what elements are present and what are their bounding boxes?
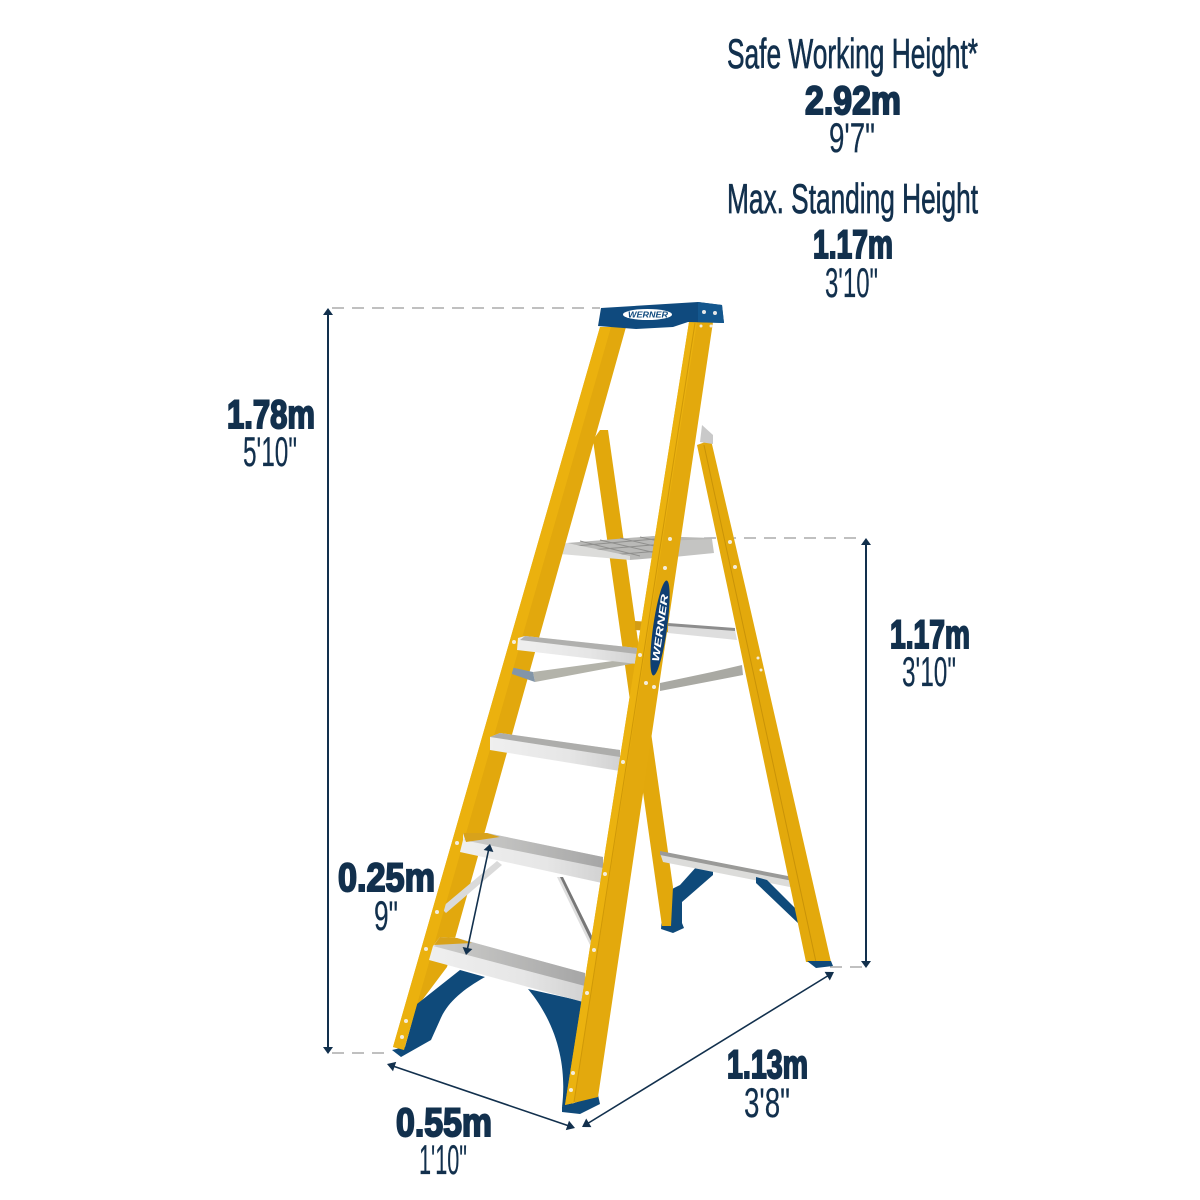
platform — [546, 536, 714, 560]
safe working height text block: 9'7" — [829, 114, 875, 161]
label: width: 0.55m — [396, 1101, 492, 1145]
safe working height text block: Safe Working Height* — [727, 30, 978, 77]
front left rail front strip — [393, 327, 611, 1050]
label: width — [396, 1101, 492, 1183]
hinge bracket — [700, 425, 713, 444]
label: overall height — [227, 393, 315, 475]
dashed guide lines — [332, 308, 862, 1053]
label: overall height: 5'10" — [243, 428, 297, 475]
rear right foot brace — [756, 877, 809, 960]
safe working height text block — [727, 30, 978, 161]
safe working height text block: 2.92m — [805, 79, 901, 123]
label: platform height — [890, 613, 970, 695]
label: step spacing: 9" — [374, 892, 398, 939]
ladder illustration — [392, 302, 833, 1114]
max standing height text block: 3'10" — [825, 259, 878, 306]
right spreader brace — [660, 665, 743, 691]
front right foot cap — [562, 1095, 600, 1114]
front left rail side — [393, 327, 626, 1050]
max standing height text block: Max. Standing Height — [727, 175, 978, 222]
max standing height text block: 1.17m — [813, 223, 893, 267]
step 5 — [429, 937, 585, 1002]
rear right rail — [697, 440, 831, 962]
label: overall height: 1.78m — [227, 393, 315, 437]
rear left rail — [593, 430, 673, 926]
max standing height text block — [727, 175, 978, 306]
rear right foot cap — [807, 961, 833, 968]
logo: werner cap badge: WERNER — [628, 310, 669, 320]
rear left foot — [661, 865, 713, 933]
depth dimension arrow — [582, 972, 834, 1127]
front right rail — [565, 322, 713, 1105]
step 2 — [517, 636, 637, 664]
label: depth — [727, 1043, 808, 1126]
rivets — [400, 324, 762, 1092]
label: depth: 3'8" — [744, 1079, 790, 1126]
front left foot — [392, 970, 485, 1057]
height dimension arrow — [323, 308, 333, 1054]
left spreader brace — [510, 660, 636, 682]
label: depth: 1.13m — [727, 1043, 808, 1087]
front right foot brace — [528, 989, 586, 1107]
lower right brace — [557, 877, 592, 945]
step spacing dimension arrow — [463, 844, 493, 955]
step 3 — [490, 733, 620, 771]
label: width: 1'10" — [419, 1136, 467, 1183]
logo: werner rail badge — [646, 579, 674, 677]
label: platform height: 1.17m — [890, 613, 970, 657]
platform height dimension arrow — [861, 538, 871, 968]
label: step spacing — [338, 856, 435, 939]
rear upper step — [635, 621, 737, 640]
logo: werner rail badge: WERNER — [651, 593, 671, 663]
width dimension arrow — [387, 1062, 575, 1130]
step 4 — [460, 833, 603, 883]
label: platform height: 3'10" — [902, 648, 956, 695]
label: step spacing: 0.25m — [338, 856, 435, 900]
lower left brace — [441, 861, 502, 913]
rear lower step — [660, 851, 795, 888]
top cap — [598, 302, 724, 329]
